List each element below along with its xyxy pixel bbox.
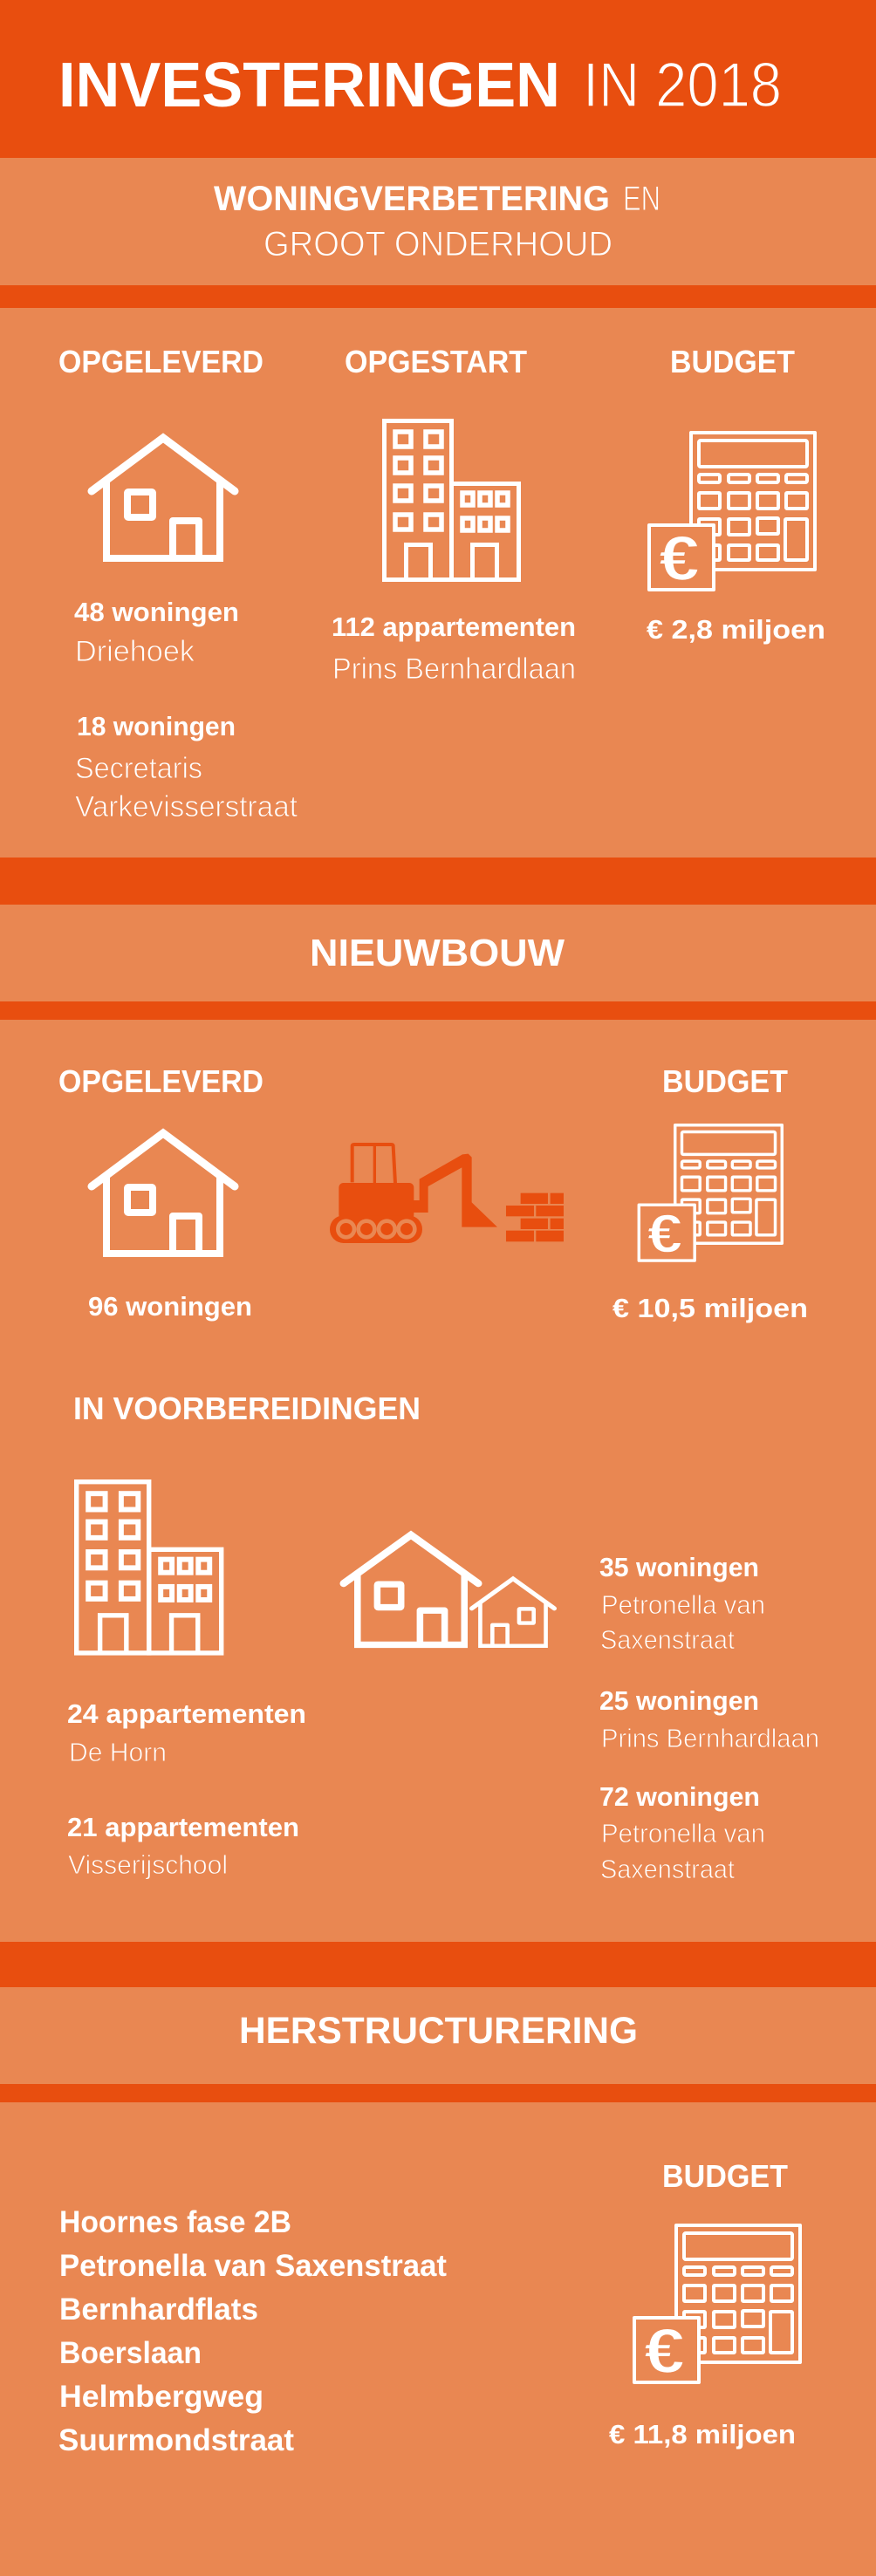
- heading: opgeleverd: OPGELEVERD: [58, 344, 263, 379]
- text: 48 woningen: [74, 597, 239, 668]
- text: 72 woningen: [599, 1781, 765, 1884]
- icon: calculator with euro: €: [644, 2317, 685, 2387]
- band: title background: [0, 0, 876, 158]
- text: 72 woningen: Petronella van: [601, 1818, 765, 1848]
- heading: budget: BUDGET: [662, 2158, 788, 2194]
- text: 48 woningen: Driehoek: [75, 635, 195, 668]
- icon: calculator with euro: €: [659, 524, 700, 594]
- text: 18 woningen: 18 woningen: [77, 711, 236, 741]
- text: 18 woningen: Secretaris: [75, 752, 202, 785]
- title: IN 2018: [583, 51, 782, 120]
- heading: woningverbetering en groot onderhoud: [214, 180, 660, 263]
- list: projects: Bernhardflats: [59, 2292, 258, 2327]
- text: 24 appartementen: 24 appartementen: [67, 1698, 306, 1729]
- text: 18 woningen: Varkevisserstraat: [75, 790, 298, 823]
- icon: apartment building: [384, 420, 518, 579]
- divider band 5: [0, 2084, 876, 2102]
- icon: apartment building: [77, 1482, 222, 1653]
- text: 25 woningen: Prins Bernhardlaan: [601, 1723, 819, 1753]
- heading: budget: BUDGET: [670, 344, 795, 379]
- list: projects: Petronella van Saxenstraat: [59, 2249, 447, 2283]
- text: budget amount: € 10,5 miljoen: [613, 1293, 808, 1323]
- text: 112 appartementen: [332, 612, 576, 686]
- heading: woningverbetering en groot onderhoud: EN: [623, 180, 660, 218]
- text: 112 appartementen: 112 appartementen: [332, 612, 576, 642]
- icon: calculator with euro: [639, 1125, 782, 1265]
- list: projects: Boerslaan: [59, 2336, 202, 2370]
- divider band 2: [0, 858, 876, 905]
- text: 35 woningen: [599, 1552, 765, 1655]
- list: projects: Hoornes fase 2B: [59, 2205, 291, 2239]
- panel: woningverbetering: [58, 344, 825, 823]
- divider band 1: [0, 285, 876, 308]
- text: 24 appartementen: [67, 1698, 306, 1767]
- panel: herstructurering: [58, 2158, 800, 2457]
- text: 18 woningen: [75, 711, 298, 823]
- icon: calculator with euro: [649, 433, 815, 594]
- list: projects: [58, 2205, 447, 2457]
- text: 25 woningen: 25 woningen: [599, 1685, 759, 1716]
- icon: calculator with euro: [634, 2225, 800, 2387]
- divider band 4: [0, 1942, 876, 1987]
- heading: opgeleverd: OPGELEVERD: [58, 1063, 263, 1099]
- text: 35 woningen: Petronella van: [601, 1589, 765, 1620]
- text: 24 appartementen: De Horn: [69, 1737, 167, 1767]
- list: projects: Suurmondstraat: [58, 2423, 294, 2457]
- text: 72 woningen: Saxenstraat: [600, 1854, 735, 1884]
- text: 21 appartementen: [67, 1812, 299, 1880]
- text: 35 woningen: Saxenstraat: [600, 1624, 735, 1655]
- heading: in voorbereidingen: IN VOORBEREIDINGEN: [73, 1390, 421, 1426]
- text: 25 woningen: [599, 1685, 819, 1753]
- icon: excavator and bricks: [330, 1145, 564, 1243]
- text: 112 appartementen: Prins Bernhardlaan: [332, 653, 576, 686]
- icon: calculator with euro: €: [647, 1205, 682, 1265]
- heading: opgestart: OPGESTART: [345, 344, 527, 379]
- text: 72 woningen: 72 woningen: [599, 1781, 760, 1812]
- text: 35 woningen: 35 woningen: [599, 1552, 759, 1582]
- text: 96 woningen: 96 woningen: [88, 1291, 252, 1322]
- text: 48 woningen: 48 woningen: [74, 597, 239, 627]
- heading: herstructurering: HERSTRUCTURERING: [239, 2010, 638, 2052]
- icon: house: [92, 1133, 235, 1254]
- text: budget amount: € 2,8 miljoen: [647, 614, 825, 645]
- heading: woningverbetering en groot onderhoud: GROOT ONDERHOUD: [263, 225, 613, 263]
- text: budget amount: € 11,8 miljoen: [609, 2419, 796, 2450]
- heading: woningverbetering en groot onderhoud: WONINGVERBETERING: [214, 180, 610, 218]
- title: INVESTERINGEN: [58, 51, 560, 120]
- icon: house: [92, 438, 235, 558]
- heading: nieuwbouw: NIEUWBOUW: [310, 932, 565, 974]
- icon: two houses: [344, 1535, 554, 1646]
- text: 21 appartementen: Visserijschool: [68, 1849, 228, 1880]
- heading: budget: BUDGET: [662, 1063, 788, 1099]
- panel: nieuwbouw: [58, 1063, 819, 1884]
- text: 21 appartementen: 21 appartementen: [67, 1812, 299, 1842]
- list: projects: Helmbergweg: [59, 2380, 263, 2414]
- divider band 3: [0, 1001, 876, 1020]
